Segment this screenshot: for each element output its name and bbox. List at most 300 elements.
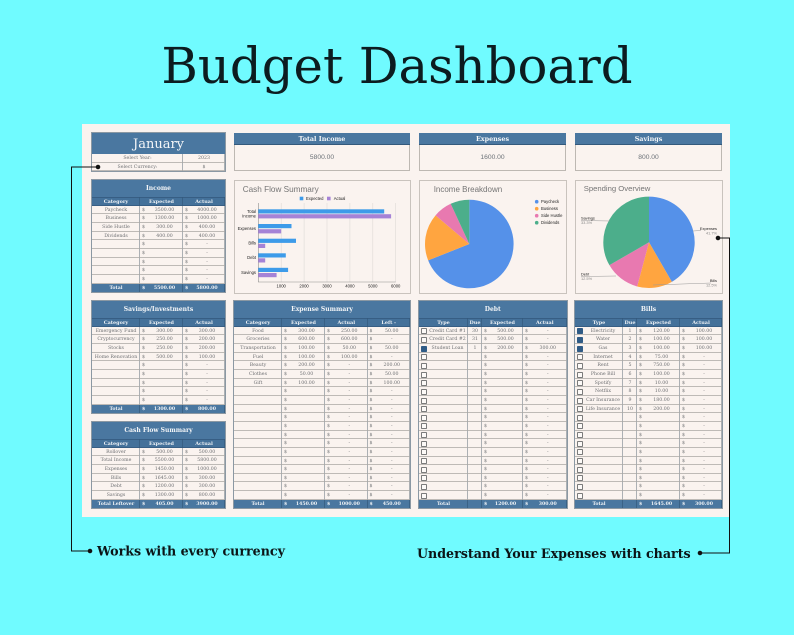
- panel: expense summary table: $: [370, 337, 372, 342]
- panel: expense summary table: -: [391, 407, 393, 412]
- panel: savings and investments table: $: [142, 337, 145, 342]
- panel: expense summary table: -: [391, 476, 393, 481]
- panel: savings and investments table: Expected: [149, 320, 174, 326]
- panel: debt table: $: [525, 458, 528, 464]
- panel: debt table: $: [525, 415, 528, 420]
- panel: expense summary table: $: [327, 502, 330, 507]
- panel: debt table: $: [484, 467, 487, 472]
- panel: debt table: Expected: [490, 320, 515, 326]
- panel: bills table: Gas: [599, 346, 607, 351]
- panel: cash flow summary table: 5800.00: [197, 458, 217, 463]
- panel: cash flow summary table: 1450.00: [155, 467, 174, 472]
- pie legend: [535, 199, 563, 225]
- panel: debt table: -: [547, 458, 549, 464]
- panel: expense summary table: $: [370, 389, 372, 394]
- panel: bills table: $: [682, 424, 685, 429]
- panel: bills table: $: [682, 389, 685, 394]
- panel: expense summary table: -: [391, 415, 393, 420]
- panel: debt table: $: [525, 346, 528, 351]
- axis labels: 6000: [391, 283, 401, 288]
- panel: expense summary table: -: [348, 389, 350, 394]
- panel: income table: 5800.00: [196, 286, 218, 291]
- panel: expense summary table: $: [284, 433, 287, 438]
- panel: expense summary table: 50.00: [300, 372, 313, 377]
- panel: income table: [92, 180, 225, 292]
- month heading: January: [133, 137, 184, 152]
- panel: bills table: -: [703, 476, 705, 481]
- panel: income table: Side Hustle: [102, 225, 130, 230]
- panel: bills table: -: [703, 467, 705, 472]
- panel: cash flow summary table: $: [142, 502, 145, 507]
- panel: bills table: 2: [628, 337, 631, 342]
- select year label: [92, 154, 183, 163]
- panel: savings and investments table: 500.00: [156, 355, 173, 360]
- panel: cash flow summary table: $: [185, 493, 188, 498]
- panel: bills table: -: [703, 458, 705, 464]
- panel: debt table: $: [525, 389, 528, 394]
- panel: expense summary table: -: [391, 458, 393, 464]
- panel: expense summary table: $: [284, 458, 287, 464]
- panel: savings and investments table: 800.00: [198, 407, 216, 412]
- panel: savings and investments table: Total: [109, 407, 123, 412]
- panel: bills table: -: [703, 407, 705, 412]
- chart: spending overview pie: [576, 180, 722, 294]
- panel: savings and investments table: $: [185, 355, 188, 360]
- panel: income table: $: [185, 260, 188, 265]
- panel: savings: 800.00: [638, 154, 659, 161]
- panel: bills table: $: [639, 493, 642, 498]
- panel: bills table: 120.00: [653, 329, 670, 334]
- panel: savings and investments table: $: [185, 329, 188, 334]
- select currency label: Select Currency:: [118, 165, 158, 170]
- panel: expense summary table: Expected: [291, 320, 316, 326]
- select year value: 2023: [198, 156, 210, 161]
- arrow: currency callout leader line: [72, 165, 100, 553]
- panel: bills table: $: [639, 484, 642, 489]
- panel: cash flow summary table: Expected: [149, 441, 174, 447]
- panel: expense summary table: 300.00: [298, 329, 315, 334]
- panel: income table: $: [185, 268, 188, 273]
- panel: bills table: 300.00: [695, 502, 713, 507]
- panel: debt table: $: [525, 467, 528, 472]
- month heading: [92, 133, 225, 154]
- panel: income table: $: [185, 216, 188, 221]
- panel: debt table: Due: [470, 320, 480, 326]
- panel: bills table: 9: [628, 398, 631, 403]
- panel: expense summary table: -: [391, 450, 393, 455]
- panel: income table: 400.00: [199, 234, 215, 239]
- panel: expense summary table: $: [327, 329, 330, 334]
- panel: expense summary table: Clothes: [249, 372, 267, 377]
- panel: expense summary table: $: [327, 424, 330, 429]
- panel: income table: $: [142, 251, 145, 256]
- panel: savings and investments table: 100.00: [199, 355, 215, 360]
- panel: income table: Paycheck: [105, 208, 127, 213]
- panel: bills table: -: [703, 415, 705, 420]
- panel: bills table: -: [703, 372, 705, 377]
- panel: debt table: -: [547, 398, 549, 403]
- panel: cash flow summary table: $: [185, 476, 188, 481]
- panel: bills table: -: [703, 389, 705, 394]
- panel: income table: -: [206, 260, 208, 265]
- panel: income table: $: [142, 260, 145, 265]
- select currency value: [183, 163, 225, 171]
- panel: cash flow summary table: Cash Flow Summary: [124, 427, 193, 434]
- panel: cash flow summary table: $: [142, 467, 145, 472]
- panel: expense summary table: $: [327, 450, 330, 455]
- panel: bills table: Bills: [641, 306, 656, 313]
- panel: debt table: $: [484, 450, 487, 455]
- panel: expense summary table: $: [370, 407, 372, 412]
- panel: bills table: $: [639, 450, 642, 455]
- panel: bills table: $: [639, 476, 642, 481]
- panel: expense summary table: $: [284, 441, 287, 446]
- panel: bills table: 5: [628, 363, 631, 368]
- panel: expense summary table: $: [370, 398, 372, 403]
- panel: bills table: -: [703, 381, 705, 386]
- arrow: charts callout leader line: [698, 236, 730, 555]
- panel: expense summary table: -: [391, 337, 393, 342]
- panel: income table: 3500.00: [155, 208, 174, 213]
- panel: debt table: -: [547, 329, 549, 334]
- panel: cash flow summary table: 800.00: [199, 493, 215, 498]
- panel: bills table: 6: [628, 372, 631, 377]
- panel: debt table: 200.00: [497, 346, 514, 351]
- panel: bills table: $: [639, 424, 642, 429]
- panel: expense summary table: -: [391, 433, 393, 438]
- panel: income table: $: [142, 242, 145, 247]
- panel: bills table: 7: [628, 381, 631, 386]
- panel: bills table: $: [639, 433, 642, 438]
- panel: income table: $: [142, 268, 145, 273]
- pie legend: Paycheck: [541, 199, 560, 204]
- panel: income table: $: [185, 286, 188, 291]
- panel: cash flow summary table: Debt: [110, 484, 122, 489]
- panel: debt table: $: [484, 363, 487, 368]
- callout: works with every currency: Works with every currency: [96, 544, 286, 558]
- panel: income table: Dividends: [104, 234, 128, 239]
- chart legend: Expected: [306, 196, 324, 201]
- panel: debt table: 31: [472, 337, 478, 342]
- panel: cash flow summary table: $: [142, 458, 145, 463]
- panel: expense summary table: $: [327, 398, 330, 403]
- panel: bills table: $: [639, 458, 642, 464]
- panel: debt table: Type: [437, 320, 450, 326]
- panel: debt table: $: [525, 433, 528, 438]
- panel: savings and investments table: 300.00: [156, 329, 173, 334]
- panel: bills table: $: [682, 450, 685, 455]
- panel: cash flow summary table: 1000.00: [197, 467, 217, 472]
- panel: cash flow summary table: Bills: [111, 476, 121, 481]
- panel: debt table: $: [525, 337, 528, 342]
- panel: income table: -: [206, 277, 208, 282]
- panel: savings and investments table: $: [185, 389, 188, 394]
- panel: income table: $: [185, 208, 188, 213]
- panel: expense summary table: $: [284, 381, 287, 386]
- panel: debt table: $: [525, 476, 528, 481]
- panel: bills table: $: [682, 433, 685, 438]
- panel: bills table: $: [682, 329, 685, 334]
- panel: savings and investments table: -: [206, 372, 208, 377]
- pie slice labels: 41.7%: [706, 231, 718, 236]
- panel: expense summary table: $: [370, 450, 372, 455]
- panel: savings and investments table: $: [185, 381, 188, 386]
- panel: expense summary table: 200.00: [298, 363, 315, 368]
- panel: expense summary table: $: [284, 424, 287, 429]
- panel: savings and investments table: -: [206, 381, 208, 386]
- panel: cash flow summary table: Expenses: [105, 467, 127, 472]
- panel: debt table: $: [525, 355, 528, 360]
- panel: debt table: -: [547, 484, 549, 489]
- panel: cash flow summary table: $: [185, 450, 188, 455]
- panel: cash flow summary table: Actual: [195, 441, 213, 447]
- panel: expense summary table: -: [391, 398, 393, 403]
- panel: debt table: $: [484, 355, 487, 360]
- panel: expense summary table: 50.00: [343, 346, 356, 351]
- panel: expense summary table: -: [348, 484, 350, 489]
- panel: cash flow summary table: $: [185, 458, 188, 463]
- panel: bills table: $: [639, 363, 642, 368]
- select year label: Select Year:: [123, 156, 152, 161]
- panel: debt table: $: [525, 407, 528, 412]
- panel: debt table: $: [525, 493, 528, 498]
- panel: bills table: $: [639, 337, 642, 342]
- panel: bills table: $: [639, 415, 642, 420]
- axis labels: Debt: [247, 255, 257, 260]
- panel: bills table: $: [639, 502, 642, 507]
- panel: bills table: $: [682, 337, 685, 342]
- panel: cash flow summary table: $: [142, 450, 145, 455]
- panel: savings and investments table: 250.00: [156, 346, 173, 351]
- panel: savings and investments table: $: [185, 346, 188, 351]
- panel: bills table: $: [639, 355, 642, 360]
- panel: debt table: 300.00: [540, 346, 556, 351]
- axis labels: Income: [242, 214, 257, 219]
- panel: expense summary table: $: [370, 458, 372, 464]
- panel: savings and investments table: $: [142, 346, 145, 351]
- panel: expense summary table: -: [391, 424, 393, 429]
- panel: income table: Category: [104, 199, 128, 205]
- title: Budget Dashboard: [161, 36, 633, 94]
- panel: cash flow summary table: $: [185, 484, 188, 489]
- panel: savings and investments table: Actual: [195, 320, 213, 326]
- panel: bills table: $: [682, 346, 685, 351]
- panel: savings and investments table: $: [185, 398, 188, 403]
- panel: expense summary table: Fuel: [253, 355, 263, 360]
- panel: expense summary table: $: [327, 337, 330, 342]
- panel: expense summary table: -: [348, 424, 350, 429]
- panel: debt table: $: [525, 424, 528, 429]
- panel: debt table: $: [484, 458, 487, 464]
- panel: expense summary table: -: [348, 458, 350, 464]
- panel: income table: -: [206, 268, 208, 273]
- panel: debt table: $: [525, 372, 528, 377]
- panel: cash flow summary table: $: [142, 484, 145, 489]
- panel: debt table: -: [547, 381, 549, 386]
- panel: savings and investments table: $: [142, 355, 145, 360]
- axis labels: Total: [247, 209, 256, 214]
- chart: income breakdown pie: [420, 180, 566, 294]
- panel: debt table: [419, 301, 566, 508]
- panel: bills table: 10.00: [655, 389, 668, 394]
- panel: bills table: $: [682, 363, 685, 368]
- panel: debt table: -: [547, 389, 549, 394]
- panel: bills table: $: [682, 381, 685, 386]
- panel: debt table: -: [547, 424, 549, 429]
- panel: expense summary table: -: [348, 493, 350, 498]
- panel: expenses: Expenses: [476, 135, 509, 143]
- panel: bills table: $: [639, 329, 642, 334]
- panel: debt table: 30: [472, 329, 478, 334]
- panel: bills table: 100.00: [653, 372, 670, 377]
- panel: bills table: Spotify: [595, 381, 611, 386]
- panel: debt table: $: [484, 337, 487, 342]
- chart: spending overview pie: Spending Overview: [584, 184, 651, 193]
- panel: debt table: 500.00: [497, 329, 514, 334]
- panel: bills table: -: [703, 363, 705, 368]
- panel: month selector: [92, 133, 225, 171]
- axis labels: 4000: [345, 283, 355, 288]
- panel: expense summary table: -: [348, 407, 350, 412]
- panel: income table: $: [142, 234, 145, 239]
- panel: debt table: -: [547, 415, 549, 420]
- panel: expense summary table: $: [370, 424, 372, 429]
- panel: debt table: Actual: [536, 320, 554, 326]
- pie slice labels: Expenses: [700, 226, 717, 231]
- panel: debt table: -: [547, 450, 549, 455]
- panel: bills table: $: [682, 484, 685, 489]
- panel: bills table: Internet: [593, 355, 613, 360]
- panel: savings and investments table: Cryptocurrency: [97, 337, 135, 342]
- panel: savings and investments table: $: [185, 337, 188, 342]
- panel: savings and investments table: $: [142, 372, 145, 377]
- axis labels: [238, 209, 401, 288]
- panel: savings and investments table: -: [206, 389, 208, 394]
- pie slice labels: Bills: [710, 278, 717, 283]
- panel: cash flow summary table: 5500.00: [155, 458, 174, 463]
- panel: expense summary table: $: [327, 355, 330, 360]
- panel: savings and investments table: 200.00: [199, 337, 215, 342]
- panel: bills table: -: [703, 441, 705, 446]
- panel: debt table: $: [484, 415, 487, 420]
- panel: income table: Total: [109, 286, 123, 291]
- panel: bills table: $: [639, 381, 642, 386]
- panel: expense summary table: $: [370, 493, 372, 498]
- panel: savings and investments table: $: [142, 389, 145, 394]
- panel: bills table: Expected: [646, 320, 671, 326]
- panel: bills table: $: [639, 467, 642, 472]
- panel: expense summary table: $: [284, 346, 287, 351]
- panel: income table: $: [142, 277, 145, 282]
- panel: income table: $: [142, 216, 145, 221]
- bars: [258, 209, 391, 277]
- panel: bills table: Life Insurance: [586, 407, 620, 412]
- panel: debt table: -: [547, 372, 549, 377]
- panel: expense summary table: -: [348, 381, 350, 386]
- panel: bills table: Rent: [597, 363, 609, 368]
- panel: income table: $: [185, 251, 188, 256]
- panel: bills table: $: [639, 346, 642, 351]
- panel: expense summary table: -: [348, 476, 350, 481]
- panel: expense summary table: $: [284, 389, 287, 394]
- panel: debt table: $: [484, 329, 487, 334]
- panel: bills table: $: [682, 415, 685, 420]
- panel: debt table: Student Loan: [431, 346, 464, 351]
- panel: expenses: [419, 133, 566, 171]
- panel: expense summary table: $: [370, 355, 372, 360]
- panel: income table: 400.00: [156, 234, 173, 239]
- axis labels: 3000: [322, 283, 332, 288]
- panel: expense summary table: $: [370, 415, 372, 420]
- panel: debt table: -: [547, 337, 549, 342]
- panel: debt table: Debt: [485, 306, 501, 313]
- panel: expense summary table: $: [284, 355, 287, 360]
- panel: cash flow summary table: 1200.00: [155, 484, 174, 489]
- panel: expense summary table: $: [370, 433, 372, 438]
- panel: savings and investments table: -: [206, 398, 208, 403]
- axis labels: Savings: [241, 270, 256, 275]
- pie slice labels: 12.5%: [706, 283, 718, 288]
- axis labels: 2000: [299, 283, 309, 288]
- panel: debt table: -: [547, 363, 549, 368]
- panel: bills table: Actual: [692, 320, 710, 326]
- panel: expense summary table: -: [348, 363, 350, 368]
- panel: savings and investments table: Emergency Fund: [96, 329, 136, 334]
- panel: bills table: $: [682, 476, 685, 481]
- panel: expense summary table: $: [327, 484, 330, 489]
- panel: savings: Savings: [635, 135, 662, 143]
- panel: expense summary table: $: [370, 441, 372, 446]
- panel: savings and investments table: 1300.00: [154, 407, 175, 412]
- panel: expense summary table: $: [327, 346, 330, 351]
- panel: debt table: $: [525, 363, 528, 368]
- panel: expense summary table: $: [370, 372, 372, 377]
- panel: expense summary table: $: [327, 389, 330, 394]
- panel: debt table: $: [484, 381, 487, 386]
- panel: bills table: $: [682, 441, 685, 446]
- chart: cash flow summary bar chart: Cash Flow Summary: [243, 185, 320, 194]
- panel: income table: 1000.00: [197, 216, 217, 221]
- panel: savings and investments table: Savings/Investments: [124, 306, 193, 313]
- axis labels: 5000: [368, 283, 378, 288]
- panel: debt table: $: [484, 484, 487, 489]
- panel: bills table: 100.00: [696, 346, 712, 351]
- panel: bills table: $: [682, 398, 685, 403]
- panel: expense summary table: -: [391, 493, 393, 498]
- panel: expense summary table: $: [370, 329, 372, 334]
- panel: cash flow summary table: Rollover: [106, 450, 126, 455]
- panel: expense summary table: -: [348, 372, 350, 377]
- panel: debt table: $: [525, 329, 528, 334]
- panel: debt table: 1200.00: [495, 502, 516, 507]
- panel: bills table: Phone Bill: [591, 372, 615, 377]
- panel: bills table: $: [639, 389, 642, 394]
- panel: debt table: $: [484, 389, 487, 394]
- panel: income table: 5500.00: [154, 286, 175, 291]
- pie legend: Dividends: [541, 220, 559, 225]
- panel: expense summary table: $: [327, 476, 330, 481]
- panel: savings and investments table: Stocks: [108, 346, 124, 351]
- panel: expense summary table: $: [284, 450, 287, 455]
- panel: expense summary table: Total: [251, 502, 265, 507]
- panel: expense summary table: 1000.00: [339, 502, 360, 507]
- panel: debt table: $: [484, 502, 487, 507]
- panel: bills table: 200.00: [653, 407, 670, 412]
- panel: expenses: 1600.00: [480, 154, 505, 161]
- panel: expense summary table: -: [391, 355, 393, 360]
- panel: bills table: Due: [625, 320, 635, 326]
- panel: bills table: 1645.00: [651, 502, 672, 507]
